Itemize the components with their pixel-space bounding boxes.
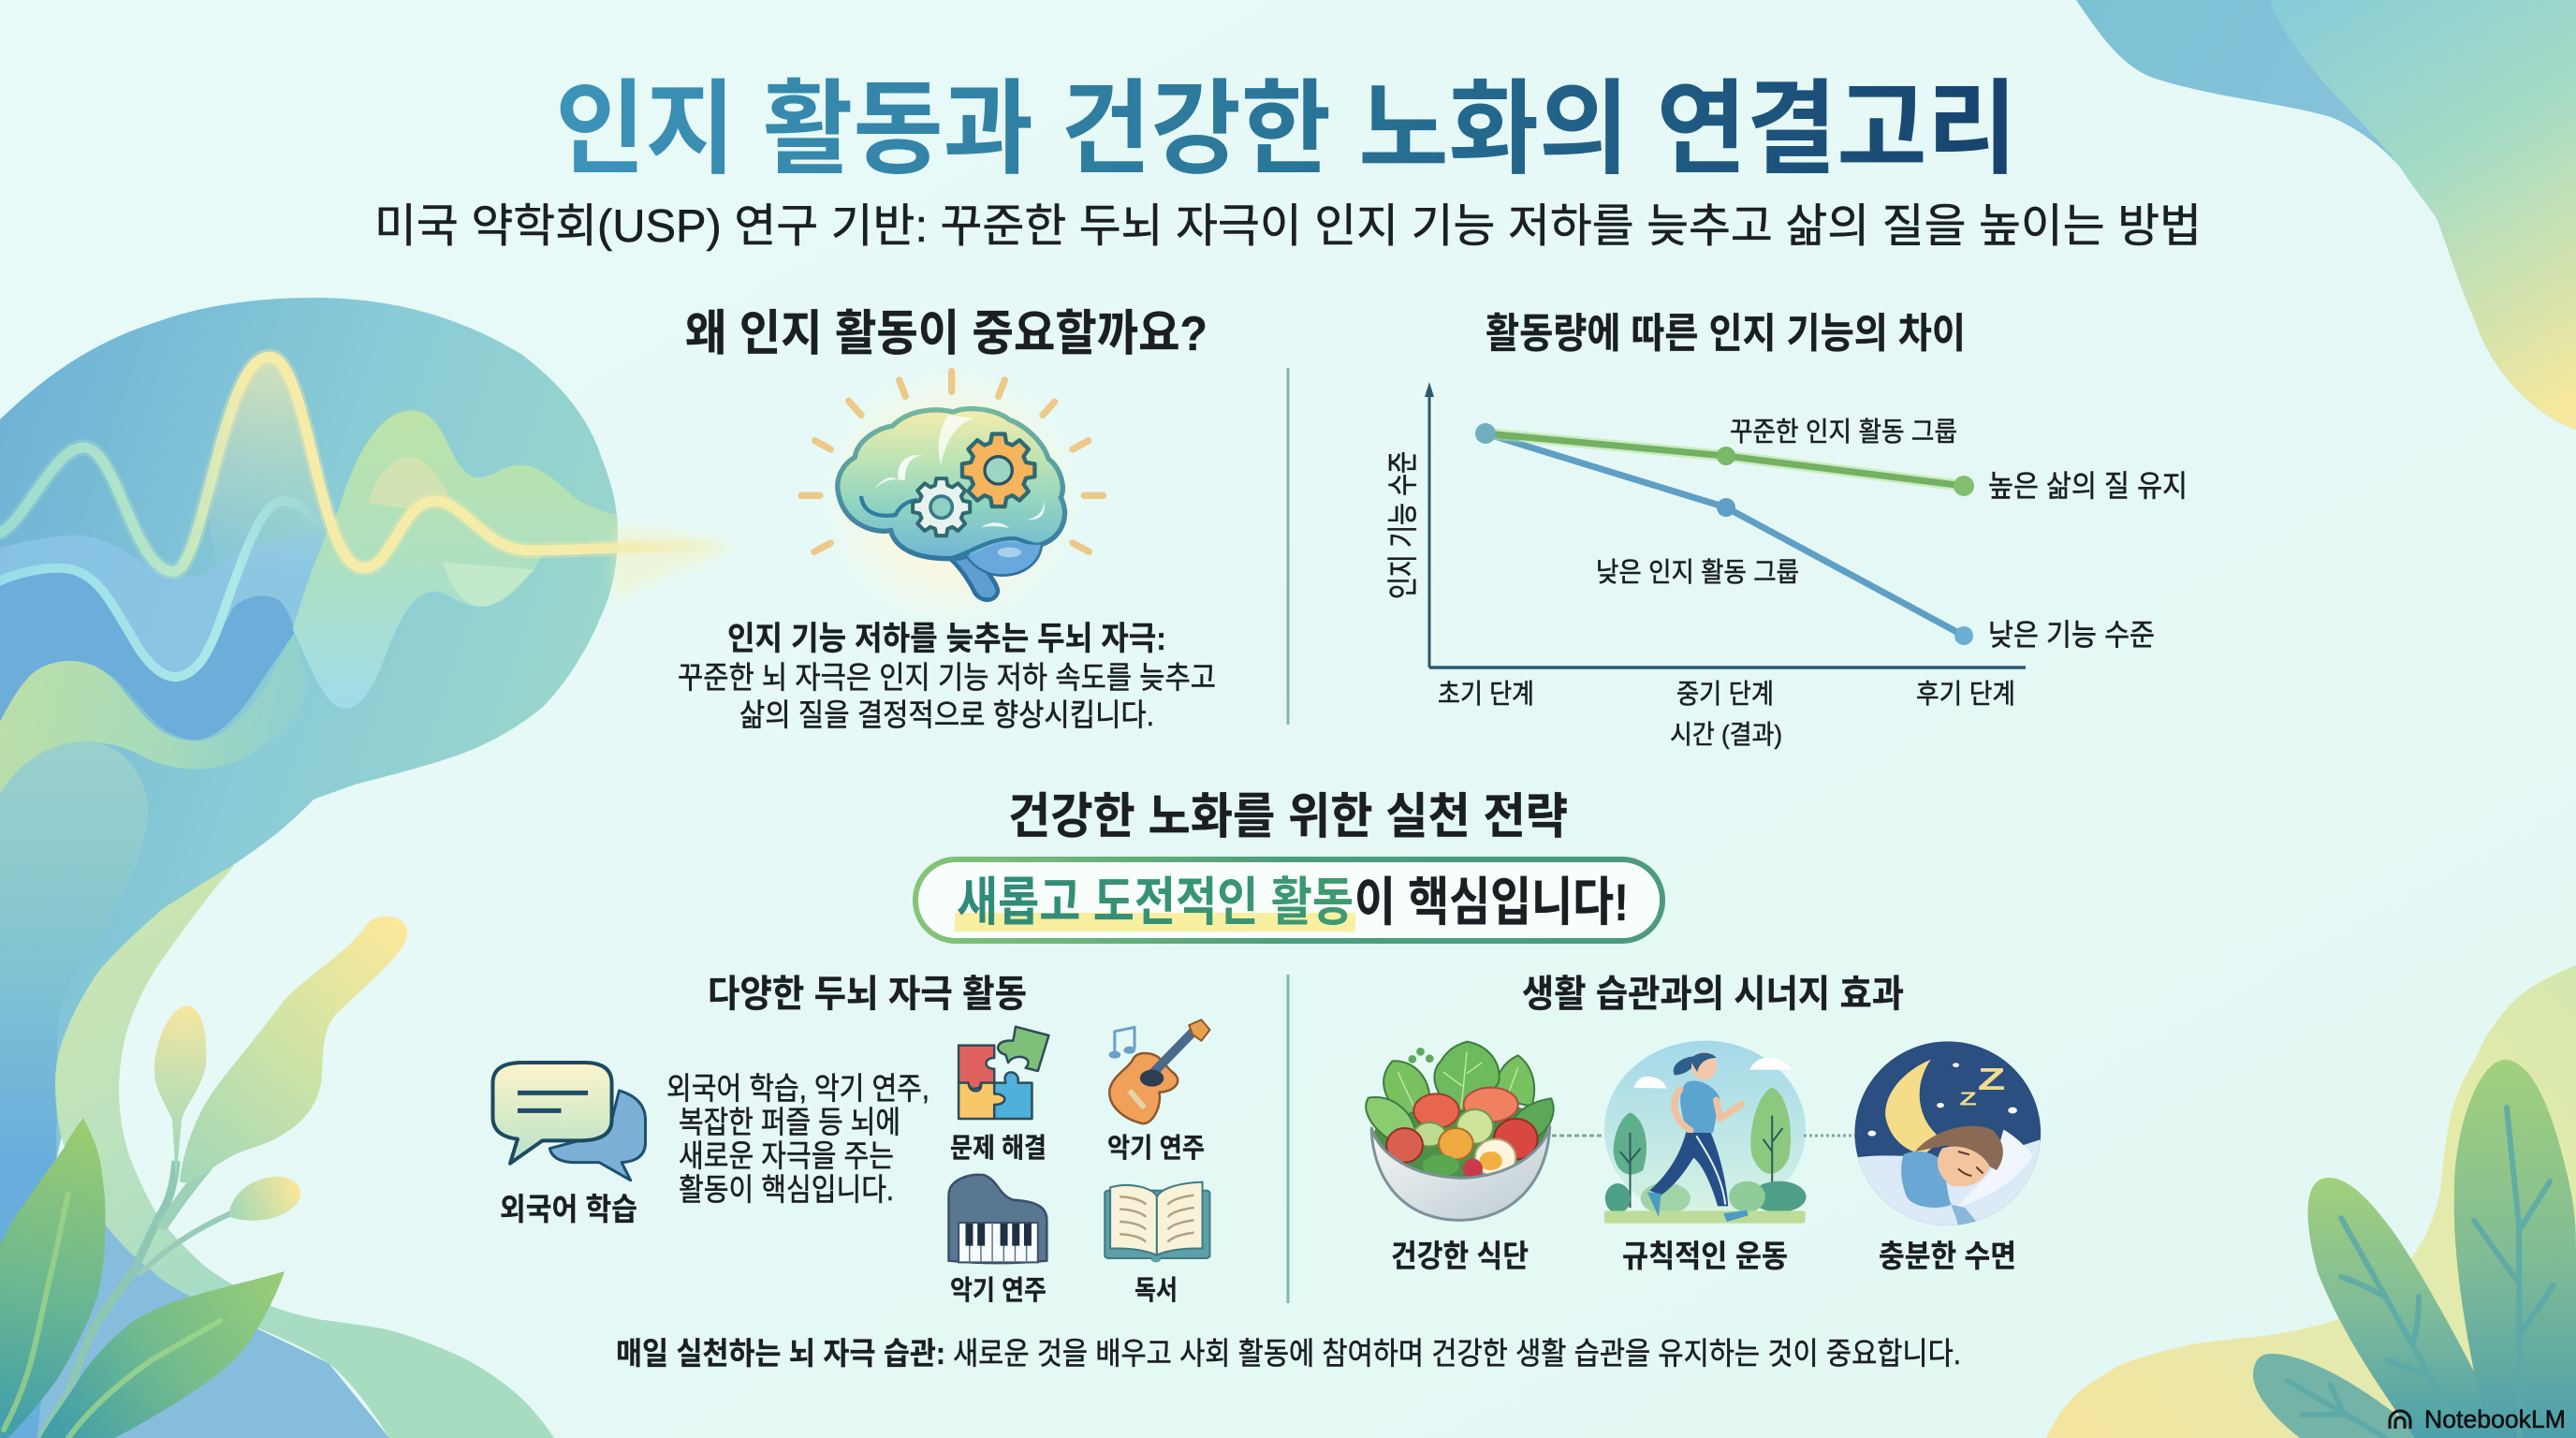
- text block: activities description: 새로운 자극을 주는: [679, 1138, 894, 1173]
- decoration: signal waves: [0, 357, 723, 677]
- icon: speech bubbles: [492, 1063, 646, 1181]
- label: reading: 독서: [1134, 1275, 1178, 1306]
- chart axes: [1425, 382, 2026, 668]
- icon: sleeping person under moon: [1853, 1039, 2042, 1229]
- text block: activities description: 활동이 핵심입니다.: [679, 1172, 894, 1207]
- label: foreign language: 외국어 학습: [500, 1192, 637, 1226]
- label: instrument 2: 악기 연주: [950, 1275, 1046, 1306]
- connector: exercise to sleep: [1804, 1135, 1855, 1137]
- text block: activities description: 외국어 학습, 악기 연주,: [666, 1071, 929, 1106]
- footer note: 새로운 것을 배우고 사회 활동에 참여하며 건강한 생활 습관을 유지하는 것이 중요합니다.: [953, 1336, 1961, 1371]
- line chart: cognitive function over time: 낮은 인지 활동 그룹: [1596, 557, 1799, 588]
- heading: why cognitive activity matters: 왜 인지 활동이 중요할까요?: [685, 307, 1208, 361]
- series: steady activity: [1486, 433, 1974, 496]
- icon: sleeping person under moon: Z: [1959, 1089, 1977, 1109]
- decoration: lower left plants: [0, 741, 554, 1438]
- callout: key message pill: 이 핵심입니다!: [1354, 873, 1629, 932]
- icon: brain with gears: [801, 365, 1103, 627]
- watermark: NotebookLM: NotebookLM: [2424, 1405, 2566, 1433]
- connector: salad to exercise: [1552, 1135, 1604, 1137]
- footer note: [616, 1336, 1961, 1371]
- heading: activities: 다양한 두뇌 자극 활동: [708, 974, 1027, 1015]
- pale tail haze: [613, 528, 739, 599]
- label: healthy diet: 건강한 식단: [1391, 1239, 1529, 1273]
- line chart: cognitive function over time: 후기 단계: [1916, 679, 2015, 710]
- label: regular exercise: 규칙적인 운동: [1622, 1239, 1788, 1273]
- series labels: 꾸준한 인지 활동 그룹: [1730, 417, 1957, 448]
- footer note: 매일 실천하는 뇌 자극 습관:: [616, 1336, 945, 1371]
- heading: strategies: 건강한 노화를 위한 실천 전략: [1008, 790, 1568, 844]
- icon: piano: [949, 1175, 1046, 1263]
- heading: lifestyle synergy: 생활 습관과의 시너지 효과: [1522, 974, 1904, 1015]
- x axis labels: 초기 단계: [1438, 679, 1534, 710]
- icon: guitar: [1109, 1020, 1210, 1123]
- text block: activities description: 복잡한 퍼즐 등 뇌에: [679, 1105, 900, 1139]
- decoration: lower right plants: [2046, 965, 2576, 1438]
- text block: brain stimulation: 인지 기능 저하를 늦추는 두뇌 자극:: [727, 621, 1166, 657]
- text block: activities description: [666, 1071, 929, 1207]
- series: low activity: [1486, 433, 1973, 645]
- icon: salad bowl: [1366, 1042, 1554, 1220]
- divider: bottom: [1286, 975, 1290, 1303]
- heading: chart: 활동량에 따른 인지 기능의 차이: [1486, 311, 1966, 357]
- icon: runner in park: [1604, 1041, 1807, 1224]
- icon: puzzle: [959, 1027, 1048, 1119]
- decoration: left wave blob: [0, 298, 739, 1217]
- label: instrument: 악기 연주: [1107, 1133, 1205, 1164]
- title: 인지 활동과 건강한 노화의 연결고리: [555, 72, 2017, 187]
- icon: sleeping person under moon: Z: [1978, 1062, 2005, 1096]
- line chart: cognitive function over time: 시간 (결과): [1670, 720, 1782, 749]
- divider: top: [1286, 368, 1290, 725]
- line chart: cognitive function over time: 중기 단계: [1676, 679, 1774, 710]
- text block: brain stimulation: [678, 621, 1216, 732]
- subtitle: 미국 약학회(USP) 연구 기반: 꾸준한 두뇌 자극이 인지 기능 저하를 늦추고 삶의 질을 높이는 방법: [374, 201, 2202, 252]
- text block: brain stimulation: 삶의 질을 결정적으로 향상시킵니다.: [739, 697, 1154, 732]
- y axis label: 인지 기능 수준: [1385, 451, 1420, 599]
- callout: key message pill: [915, 859, 1662, 941]
- icon: book: [1105, 1182, 1210, 1262]
- text block: brain stimulation: 꾸준한 뇌 자극은 인지 기능 저하 속도를 늦추고: [678, 660, 1216, 695]
- line chart: cognitive function over time: 높은 삶의 질 유지: [1988, 469, 2188, 503]
- line chart: cognitive function over time: 낮은 기능 수준: [1988, 618, 2155, 652]
- line chart: cognitive function over time: [1385, 382, 2188, 749]
- label: enough sleep: 충분한 수면: [1879, 1239, 2016, 1273]
- callout: key message pill: 새롭고 도전적인 활동: [957, 873, 1354, 932]
- decoration: top right blob: [2076, 0, 2576, 430]
- label: problem solving: 문제 해결: [950, 1133, 1046, 1164]
